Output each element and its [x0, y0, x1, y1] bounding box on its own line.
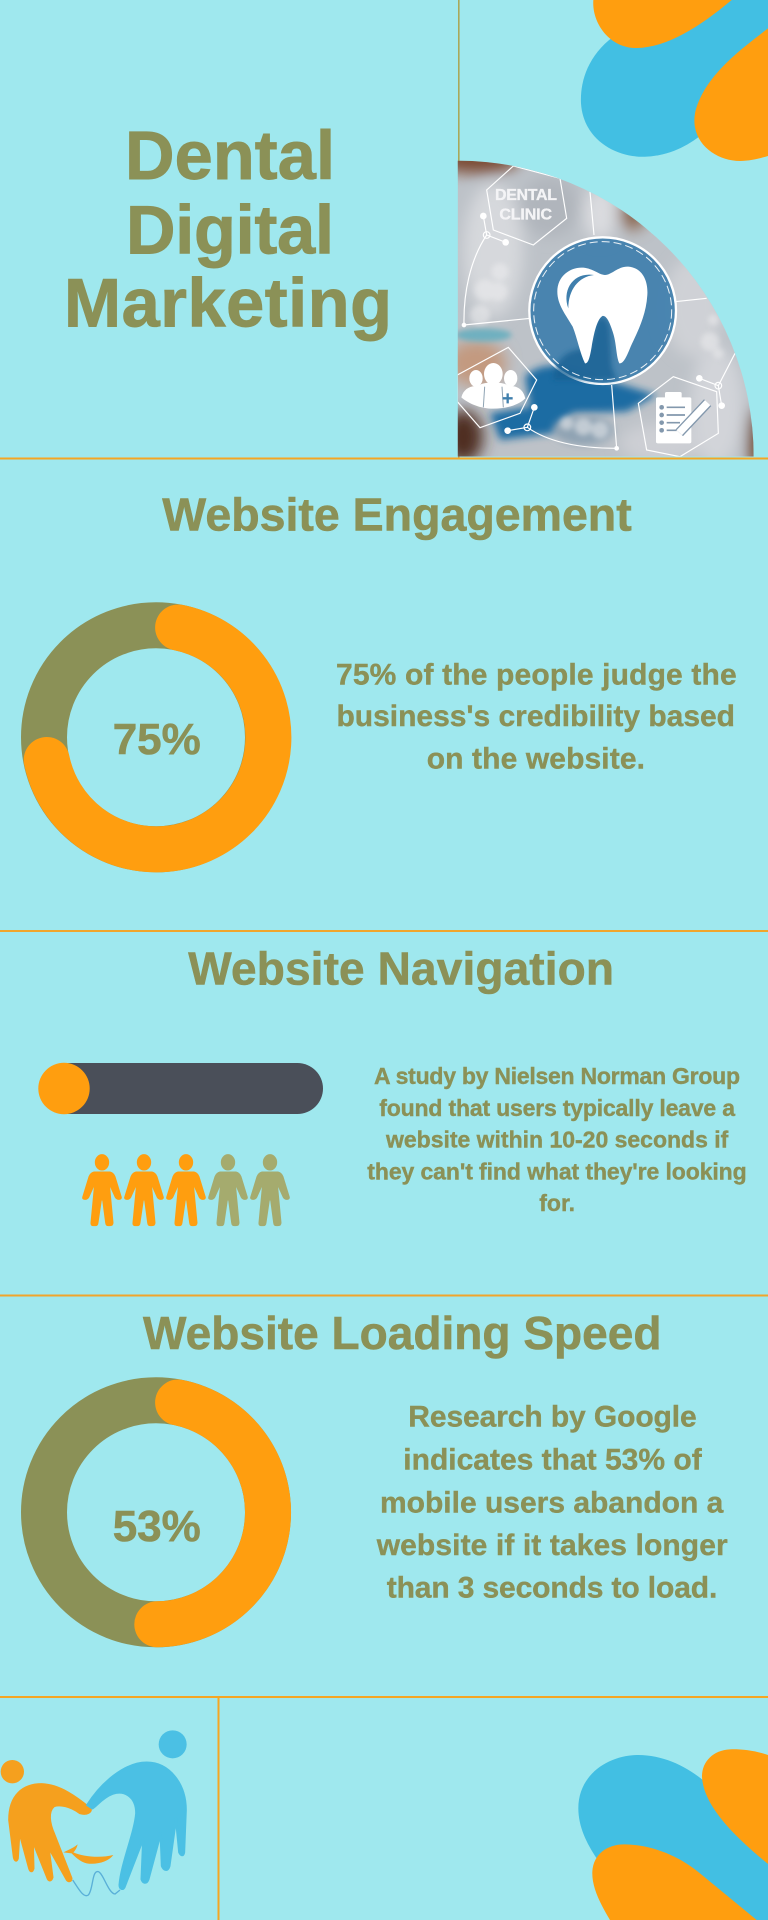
text: google research — [376, 1401, 728, 1604]
decorative blobs: top right — [581, 0, 768, 161]
title — [64, 117, 392, 342]
icon: dental clinic hexagon: DENTAL — [495, 187, 557, 204]
donut chart: 53%: 53% — [113, 1502, 201, 1551]
decorative blobs: bottom right — [578, 1749, 768, 1920]
heading: website navigation: Website Navigation — [188, 942, 614, 994]
icon: tooth badge — [529, 237, 676, 384]
donut chart: 53% — [44, 1400, 268, 1624]
title: Digital — [126, 191, 334, 268]
icon: dental clinic hexagon — [487, 166, 567, 245]
text: nielsen norman study: A study by Nielsen Norman Group — [374, 1063, 740, 1089]
text: nielsen norman study — [367, 1063, 747, 1216]
logo: hands forming a tooth — [1, 1730, 187, 1896]
icon: dental clinic hexagon: CLINIC — [499, 206, 552, 223]
text: nielsen norman study: found that users typically leave a — [379, 1095, 735, 1121]
photo: dental clinic quarter circle — [458, 160, 754, 457]
text: credibility statistic: on the website. — [427, 742, 645, 775]
progress bar — [38, 1063, 323, 1114]
text: google research: Research by Google — [408, 1401, 697, 1434]
text: google research: mobile users abandon a — [380, 1486, 724, 1519]
icon: row of five people — [83, 1155, 289, 1226]
donut chart: 75%: 75% — [113, 715, 201, 764]
donut chart: 75% — [44, 625, 268, 849]
text: google research: than 3 seconds to load. — [387, 1571, 717, 1604]
icon: medical team hexagon — [457, 347, 537, 428]
heading: website loading speed: Website Loading Speed — [143, 1307, 662, 1359]
text: credibility statistic: 75% of the people judge the — [336, 658, 737, 691]
text: nielsen norman study: they can't find what they're looking — [367, 1158, 747, 1184]
text: credibility statistic — [336, 658, 737, 775]
icon: clipboard hexagon — [638, 377, 718, 457]
text: credibility statistic: business's credibility based — [336, 700, 735, 733]
circuit lines — [464, 192, 735, 448]
text: nielsen norman study: for. — [539, 1190, 575, 1216]
heading: website engagement: Website Engagement — [162, 488, 632, 540]
text: google research: website if it takes longer — [376, 1529, 728, 1562]
text: nielsen norman study: website within 10-20 seconds if — [385, 1126, 729, 1152]
title: Dental — [125, 117, 335, 194]
text: google research: indicates that 53% of — [403, 1443, 703, 1476]
title: Marketing — [64, 265, 392, 342]
